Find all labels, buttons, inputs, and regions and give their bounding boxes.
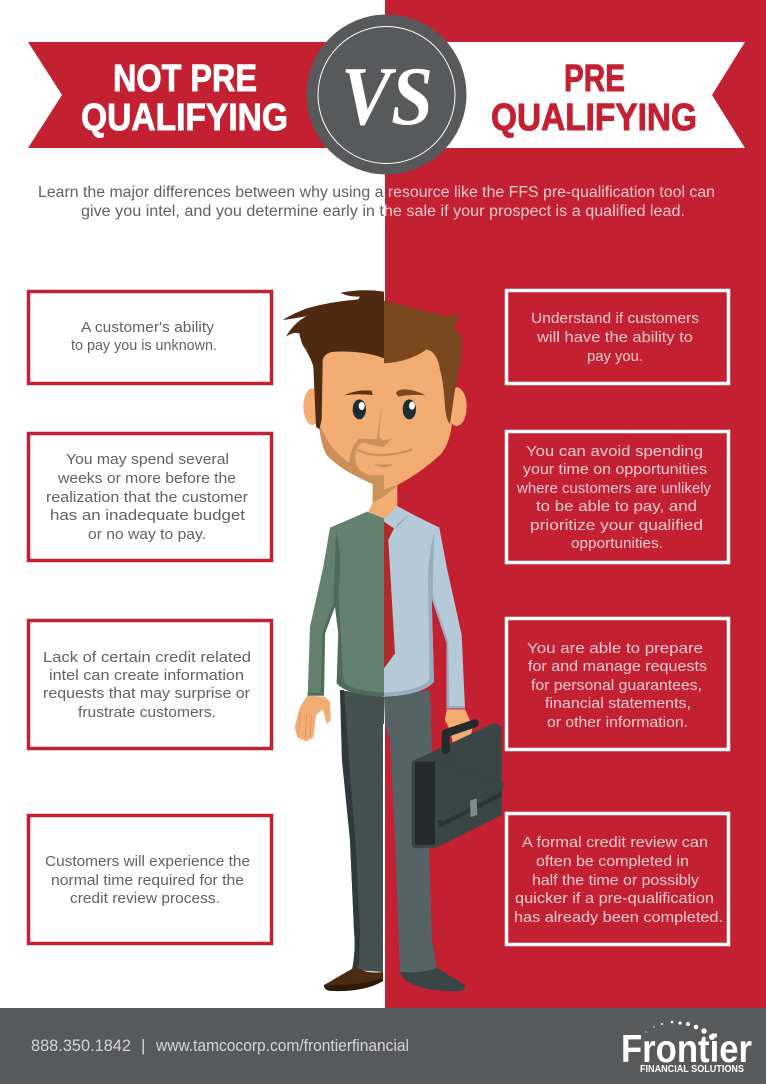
left panel 3: Lack of certain credit related (43, 649, 251, 666)
left panel 4: Customers will experience the (45, 853, 250, 870)
right panel 4: quicker if a pre-qualification (515, 890, 714, 907)
right panel 4: half the time or possibly (532, 872, 700, 889)
frontier logo: FINANCIAL SOLUTIONS (640, 1064, 744, 1075)
footer contact text (31, 1036, 409, 1055)
left panel 3 (28, 620, 272, 748)
left panel 3: intel can create information (49, 667, 244, 684)
left panel 2: or no way to pay. (88, 526, 206, 543)
briefcase (412, 723, 504, 848)
right panel 3: for and manage requests (528, 658, 707, 675)
footer contact text: | (141, 1036, 145, 1055)
left panel 1: A customer's ability (81, 319, 215, 336)
right panel 3: financial statements, (545, 695, 691, 712)
right panel 1: Understand if customers (531, 310, 699, 327)
left panel 4: credit review process. (70, 890, 220, 907)
right panel 4: A formal credit review can (522, 834, 708, 851)
banner: pre qualifying: QUALIFYING (491, 97, 697, 139)
right panel 2: opportunities. (571, 535, 663, 552)
shirt, tie and hands (295, 506, 473, 745)
banner: not pre qualifying: NOT PRE (113, 58, 257, 100)
intro text (38, 184, 715, 220)
vs badge: VS (341, 50, 433, 143)
right panel 1: will have the ability to (536, 329, 693, 346)
right panel 2: your time on opportunities (523, 461, 707, 478)
right panel 4: has already been completed. (514, 909, 723, 926)
intro text: give you intel, and you determine early in the sale if your prospect is a qualified lead. (81, 203, 685, 220)
left panel 4: normal time required for the (51, 872, 244, 889)
banner: pre qualifying: PRE (564, 58, 625, 100)
right panel 3 (506, 618, 728, 750)
banner: not pre qualifying: QUALIFYING (81, 97, 288, 139)
right panel 3: for personal guarantees, (531, 677, 702, 694)
right panel 2: prioritize your qualified (530, 517, 703, 534)
footer contact text: www.tamcocorp.com/frontierfinancial (155, 1036, 409, 1055)
banner: not pre qualifying (28, 42, 340, 148)
frontier logo: Frontier (621, 1028, 752, 1071)
right panel 3: You are able to prepare (527, 640, 703, 657)
footer bar (0, 1008, 766, 1084)
left panel 1 (28, 292, 272, 384)
head (283, 290, 467, 519)
right panel 4 (506, 814, 728, 944)
right panel 2: to be able to pay, and (536, 498, 697, 515)
right panel 2 (506, 432, 728, 562)
banner: pre qualifying (430, 42, 745, 148)
left panel 2: has an inadequate budget (50, 507, 246, 524)
right panel 2: You can avoid spending (526, 443, 703, 460)
right panel 1 (506, 290, 728, 384)
illustration: businessman (283, 290, 504, 991)
left panel 3: frustrate customers. (78, 704, 216, 721)
footer contact text: 888.350.1842 (31, 1036, 131, 1055)
right panel 2: where customers are unlikely (516, 480, 711, 497)
left panel 2: realization that the customer (46, 489, 248, 506)
right panel 3: or other information. (547, 714, 688, 731)
left panel 4 (28, 816, 272, 944)
vs badge (306, 14, 466, 174)
right panel 4: often be completed in (536, 853, 689, 870)
left panel 2: You may spend several (66, 451, 229, 468)
left panel 2: weeks or more before the (57, 470, 236, 487)
left panel 1: to pay you is unknown. (71, 337, 217, 354)
legs and shoes (324, 690, 465, 991)
left panel 2 (28, 434, 272, 560)
right panel 1: pay you. (587, 348, 643, 365)
left panel 3: requests that may surprise or (43, 685, 250, 702)
intro text: Learn the major differences between why using a resource like the FFS pre-qualification tool can (38, 184, 715, 201)
